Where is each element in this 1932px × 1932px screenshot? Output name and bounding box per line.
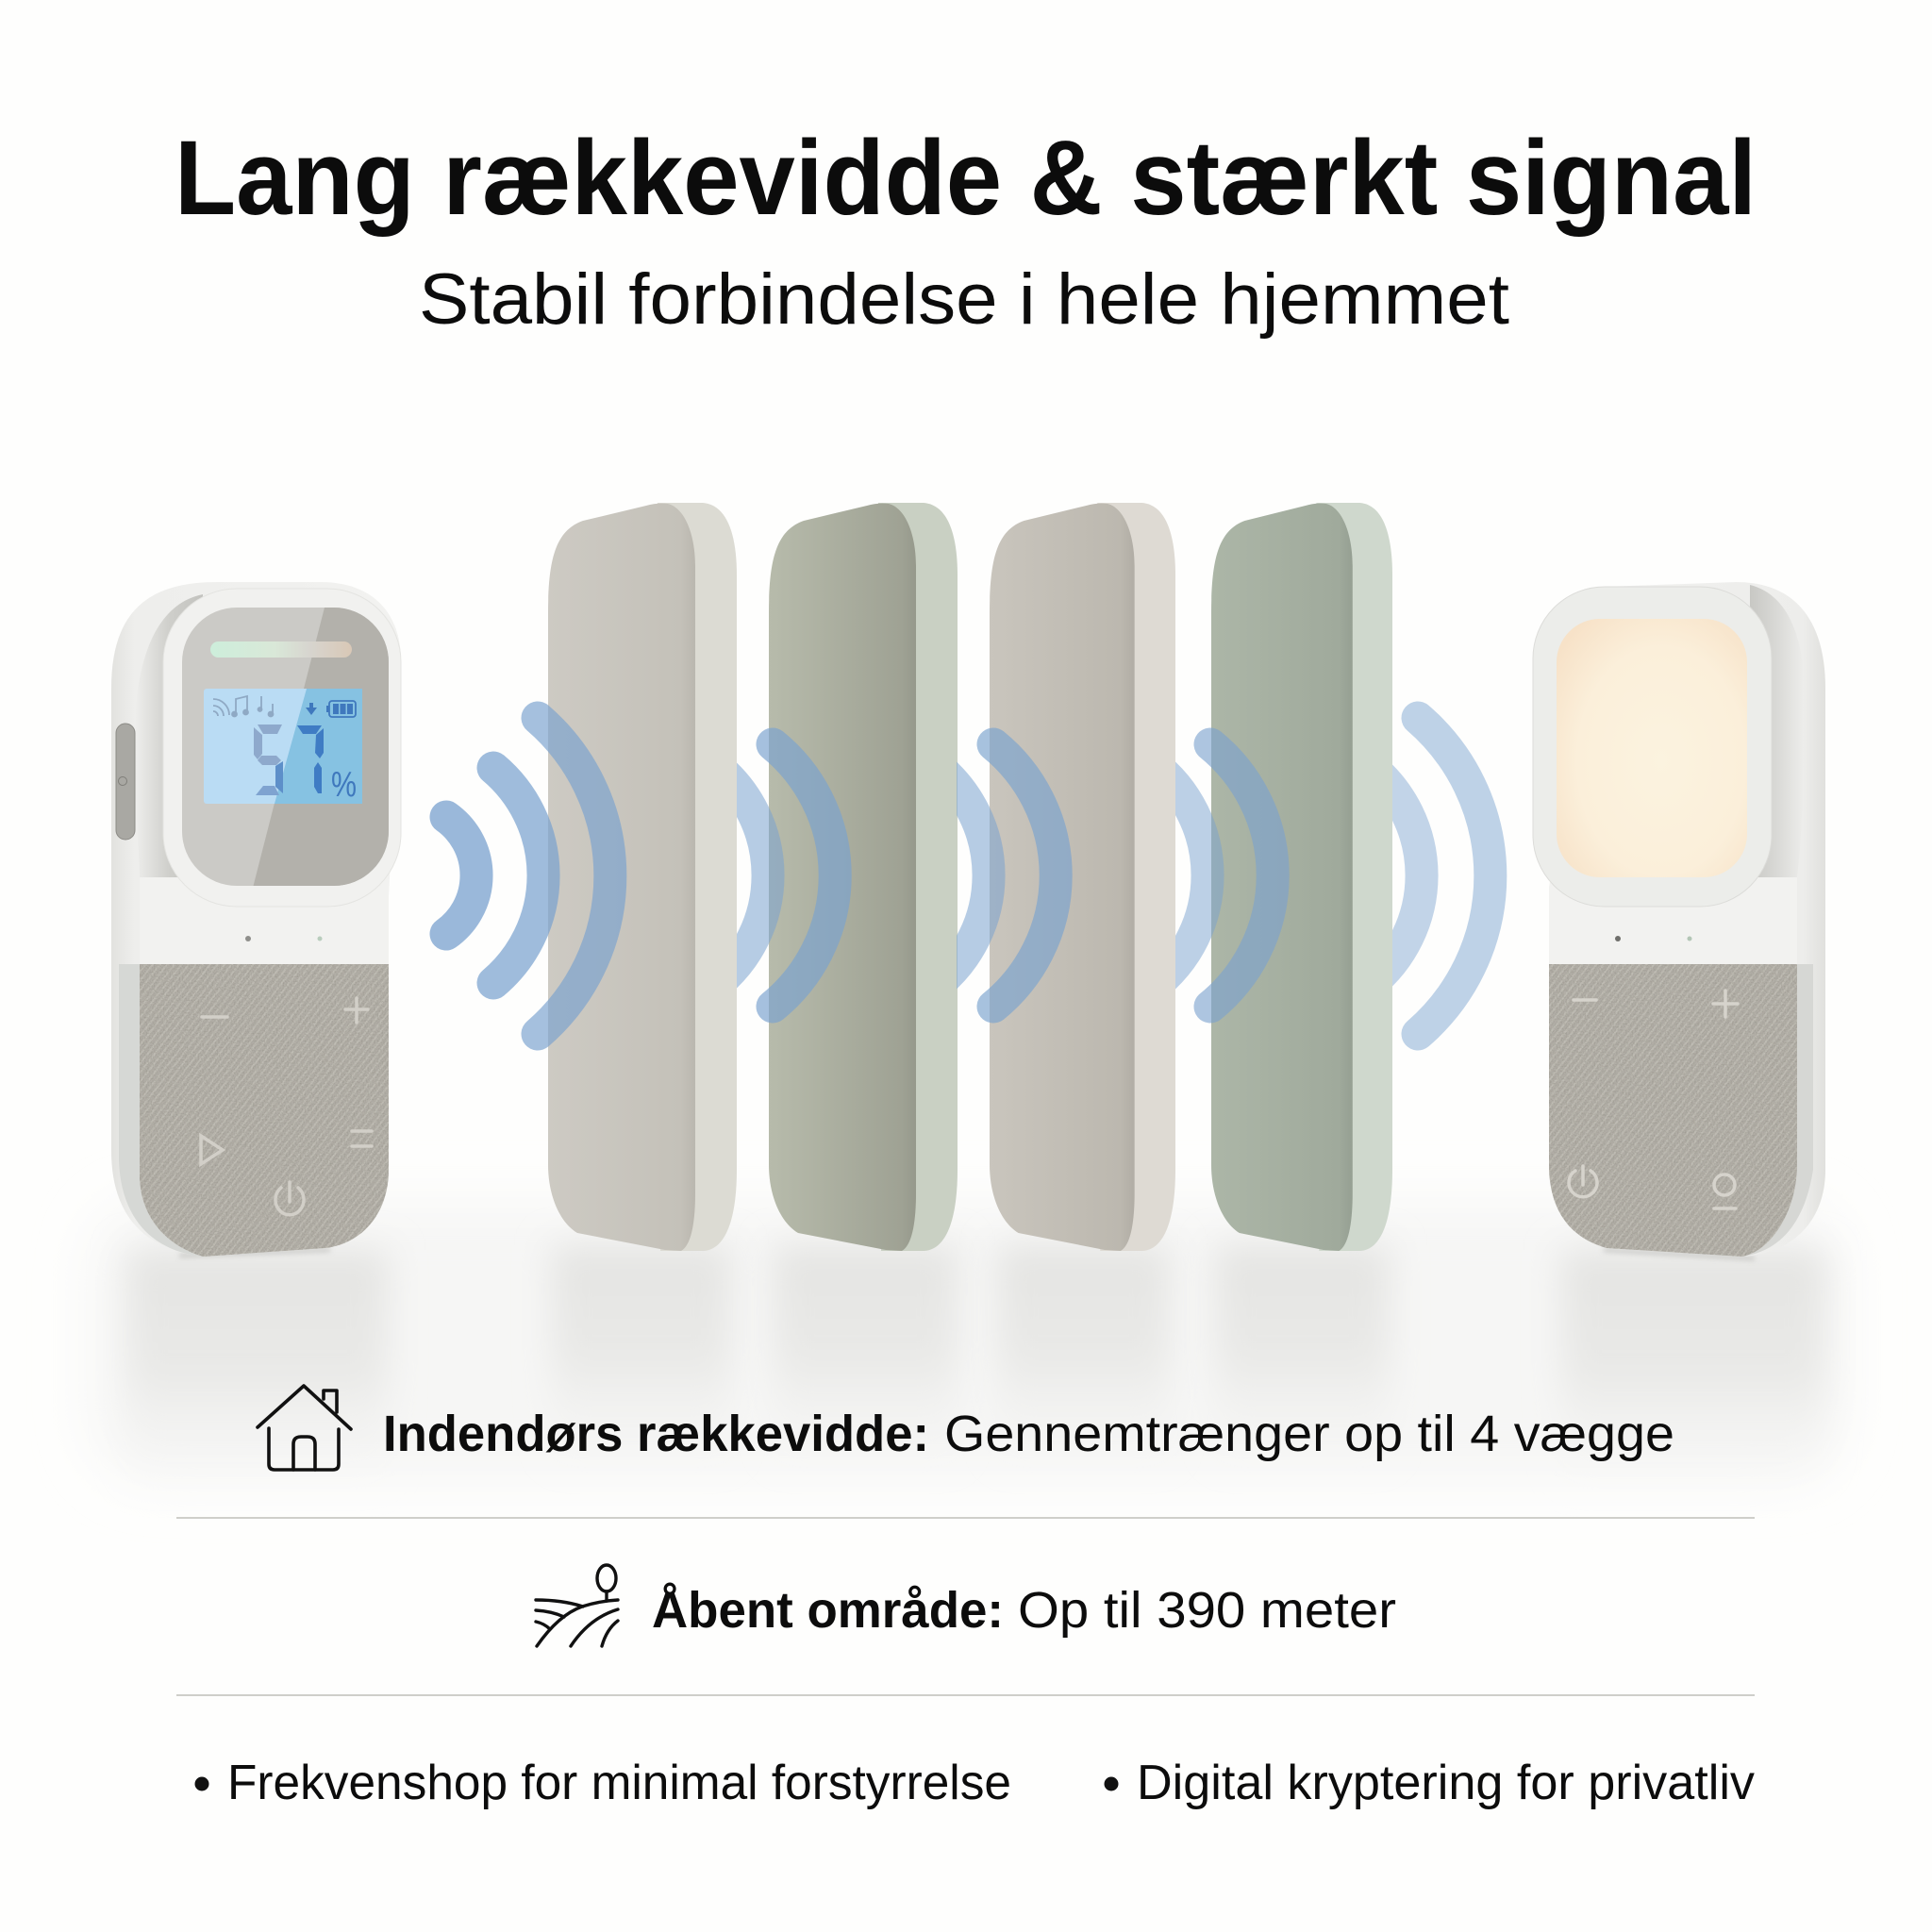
fabric buttons: [1569, 991, 1738, 1208]
light bezel: [1533, 587, 1772, 907]
device body: [1549, 582, 1825, 1257]
title: Lang rækkevidde & stærkt signal: [175, 119, 1757, 237]
digit 7: [297, 725, 324, 793]
signal waves: source to wall 1: [446, 718, 610, 1034]
fabric panel: [140, 964, 389, 1257]
wall 1: [548, 503, 737, 1251]
floor with soft reflections: [90, 1203, 1844, 1491]
fabric panel: [1549, 964, 1797, 1257]
device: left baby unit with LCD screen: [111, 582, 401, 1257]
download and battery icons: [306, 701, 356, 717]
fabric buttons: [201, 998, 372, 1215]
glowing light panel: [1557, 619, 1747, 877]
side button: [116, 724, 135, 840]
indoor label: Indendørs rækkevidde:: [383, 1406, 929, 1462]
bullet: digital encryption: Digital kryptering for privatliv: [1137, 1756, 1755, 1810]
status icons: [213, 696, 274, 717]
open area value: Op til 390 meter: [1018, 1582, 1396, 1639]
indicator dots: [245, 936, 323, 941]
info row: indoor range: [258, 1386, 1674, 1470]
device body: [111, 582, 401, 1257]
glass screen: [182, 604, 396, 891]
digit 5: [254, 724, 283, 795]
indoor value: Gennemtrænger op til 4 vægge: [944, 1406, 1674, 1462]
signal waves: through wall 1: [718, 744, 835, 1007]
bullet: frequency hopping: Frekvenshop for minimal forstyrrelse: [227, 1756, 1011, 1810]
wall 2: [769, 503, 958, 1251]
divider: [176, 1517, 1755, 1519]
indicator dots: [1615, 936, 1692, 941]
subtitle: Stabil forbindelse i hele hjemmet: [419, 259, 1509, 340]
LCD display: [204, 689, 362, 805]
signal waves: through wall 4 to receiver: [1372, 718, 1491, 1034]
icon: house: [258, 1386, 351, 1470]
divider: [176, 1694, 1755, 1696]
open area label: Åbent område:: [652, 1582, 1004, 1639]
wall 4: [1211, 503, 1392, 1251]
icon: field and tree: [536, 1565, 618, 1646]
wall 3: [990, 503, 1175, 1251]
info row: open area: [536, 1565, 1396, 1646]
signal waves: through wall 2: [939, 744, 1056, 1007]
percent sign: %: [331, 765, 357, 805]
signal strength bar: [210, 641, 352, 658]
signal waves: through wall 3: [1158, 744, 1273, 1007]
device: right light unit: [1533, 582, 1825, 1257]
screen bezel: [163, 589, 401, 907]
